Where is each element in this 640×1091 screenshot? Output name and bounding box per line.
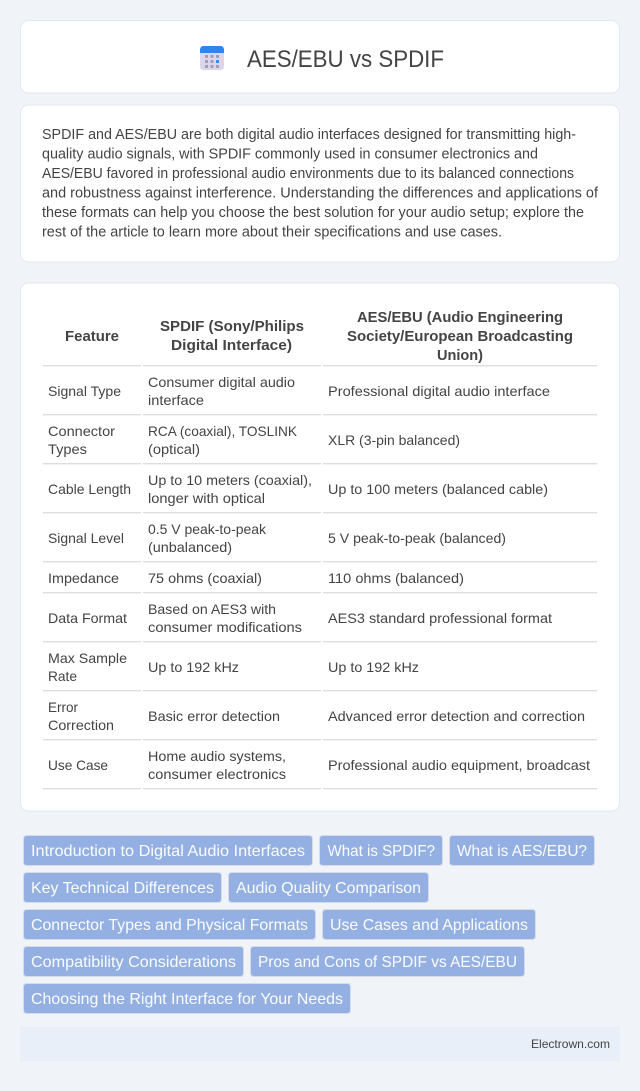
row: cable length: longer with optical: [148, 490, 265, 506]
row: connector types: Connector: [48, 423, 115, 439]
intro paragraph: these formats can help you choose the best solution for your audio setup; explore the: [42, 204, 584, 221]
tag: introduction: [24, 836, 312, 866]
row: use case: Professional audio equipment, broadcast: [328, 757, 590, 773]
row: data format: AES3 standard professional format: [328, 610, 552, 626]
tag: what is spdif: What is SPDIF?: [328, 843, 435, 860]
row: signal type: [48, 374, 550, 408]
header card: [20, 20, 620, 93]
row: signal type: Signal Type: [48, 383, 121, 399]
tag: key technical differences: Key Technical Differences: [31, 880, 214, 897]
tag: what is spdif: [320, 836, 442, 866]
intro paragraph: and robustness against interference. Understanding the differences and applications of: [42, 184, 599, 202]
row: use case: Home audio systems,: [148, 748, 286, 764]
intro card: [20, 105, 620, 262]
row: connector types: (optical): [148, 441, 200, 457]
row: data format: consumer modifications: [148, 619, 302, 635]
row: cable length: Up to 10 meters (coaxial),: [148, 472, 312, 488]
intro paragraph: [42, 126, 599, 240]
tag: use cases: [322, 910, 536, 940]
row: signal level: 5 V peak-to-peak (balanced): [328, 530, 506, 546]
intro paragraph: SPDIF and AES/EBU are both digital audio interfaces designed for transmitting high-: [42, 126, 576, 143]
tag: what is aes/ebu: What is AES/EBU?: [457, 843, 587, 860]
row: impedance: 110 ohms (balanced): [328, 570, 464, 586]
row: signal type: Professional digital audio interface: [328, 383, 550, 399]
row: signal level: 0.5 V peak-to-peak: [148, 521, 267, 537]
table header row: Society/European Broadcasting: [347, 328, 573, 345]
row: connector types: [48, 423, 460, 457]
row: error correction: Correction: [48, 717, 114, 733]
row: signal type: Consumer digital audio: [148, 374, 295, 390]
row: data format: [48, 601, 552, 635]
tag: choosing the right interface: [24, 984, 350, 1014]
tag: compatibility: Compatibility Considerations: [31, 954, 236, 971]
row: signal level: [48, 521, 506, 555]
table header row: SPDIF (Sony/Philips: [160, 318, 304, 335]
intro paragraph: quality audio signals, with SPDIF commonly used in consumer electronics and: [42, 146, 538, 162]
row: connector types: Types: [48, 441, 87, 457]
tag: audio quality comparison: [228, 872, 428, 902]
row: max sample rate: Up to 192 kHz: [148, 659, 239, 675]
tag: connector types: Connector Types and Physical Formats: [31, 917, 308, 934]
comparison table card: [20, 283, 620, 811]
icon: calendar: [200, 46, 224, 70]
table header row: AES/EBU (Audio Engineering: [357, 309, 563, 326]
row: max sample rate: Rate: [48, 668, 77, 684]
row: cable length: Up to 100 meters (balanced cable): [328, 481, 548, 497]
row: signal level: (unbalanced): [148, 539, 232, 555]
row: max sample rate: Max Sample: [48, 650, 127, 666]
table header row: [65, 309, 573, 364]
row: impedance: 75 ohms (coaxial): [148, 570, 262, 586]
tag: what is aes/ebu: [450, 836, 594, 866]
footer source: Electrown.com: [531, 1037, 610, 1051]
tag: connector types: [24, 910, 316, 940]
footer band: [20, 1027, 620, 1061]
table header row: Feature: [65, 328, 119, 345]
tag: pros and cons: Pros and Cons of SPDIF vs AES/EBU: [258, 954, 517, 971]
row: use case: Use Case: [48, 757, 108, 773]
row: signal level: Signal Level: [48, 530, 124, 546]
row: data format: Based on AES3 with: [148, 601, 276, 617]
row: connector types: XLR (3-pin balanced): [328, 432, 460, 448]
row: error correction: Error: [48, 699, 78, 715]
tag: use cases: Use Cases and Applications: [330, 917, 528, 934]
intro paragraph: rest of the article to learn more about their specifications and use cases.: [42, 224, 502, 240]
row: cable length: [48, 472, 548, 506]
tag: audio quality comparison: Audio Quality Comparison: [236, 880, 421, 897]
intro paragraph: AES/EBU favored in professional audio environments due to its balanced connections: [42, 165, 574, 182]
title: AES/EBU vs SPDIF: [247, 46, 444, 73]
row: error correction: [48, 699, 585, 733]
table header row: Union): [437, 347, 483, 364]
row: connector types: RCA (coaxial), TOSLINK: [148, 423, 298, 439]
row: max sample rate: [48, 650, 419, 684]
row: data format: Data Format: [48, 610, 127, 626]
table header row: Digital Interface): [171, 337, 292, 354]
tag: pros and cons: [250, 946, 524, 976]
tag: compatibility: [24, 946, 244, 976]
tag: choosing the right interface: Choosing the Right Interface for Your Needs: [31, 991, 343, 1008]
row: error correction: Basic error detection: [148, 708, 280, 724]
row: impedance: [48, 570, 464, 586]
topic tags: [24, 836, 594, 1014]
tag: introduction: Introduction to Digital Audio Interfaces: [31, 843, 305, 860]
row: error correction: Advanced error detection and correction: [328, 708, 585, 724]
row: use case: [48, 748, 590, 782]
row: max sample rate: Up to 192 kHz: [328, 659, 419, 675]
row: impedance: Impedance: [48, 570, 119, 586]
row: cable length: Cable Length: [48, 481, 131, 497]
tag: key technical differences: [24, 872, 222, 902]
row: use case: consumer electronics: [148, 766, 286, 782]
row: signal type: interface: [148, 392, 204, 408]
